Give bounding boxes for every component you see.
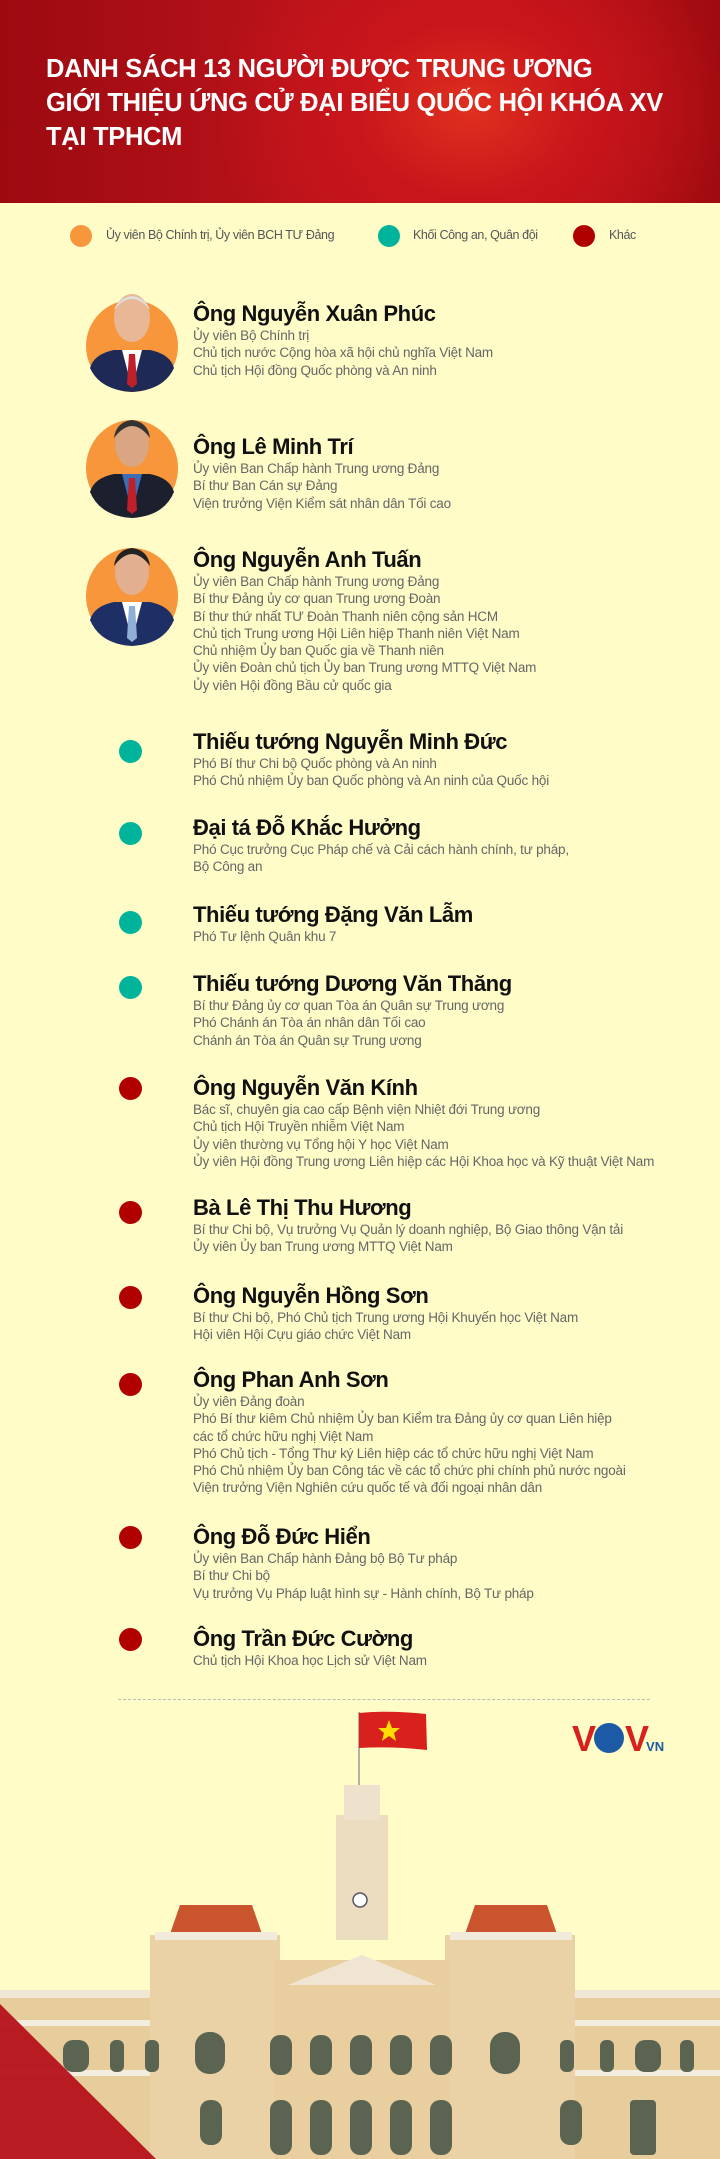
legend: Ủy viên Bộ Chính trị, Ủy viên BCH TƯ Đảng [106,228,334,242]
entry: Trần Đức Cường: Ông Trần Đức Cường [193,1626,413,1651]
entry: Đỗ Đức Hiển: Vụ trưởng Vụ Pháp luật hình sự - Hành chính, Bộ Tư pháp [193,1586,534,1601]
entry: Lê Minh Trí: Bí thư Ban Cán sự Đảng [193,478,337,493]
entry: Nguyễn Văn Kính: Ủy viên Hội đồng Trung ương Liên hiệp các Hội Khoa học và Kỹ thuật Việt Nam [193,1154,654,1169]
entry: Nguyễn Anh Tuấn: Ủy viên Hội đồng Bầu cử quốc gia [193,678,392,693]
entry: Nguyễn Xuân Phúc: Chủ tịch nước Cộng hòa xã hội chủ nghĩa Việt Nam [193,345,493,360]
entry: Nguyễn Hồng Sơn: Ông Nguyễn Hồng Sơn [193,1283,428,1308]
entry: Phan Anh Sơn: Phó Chủ tịch - Tổng Thư ký Liên hiệp các tổ chức hữu nghị Việt Nam [193,1446,593,1461]
dot: teal [119,976,142,999]
red corner triangle [0,2004,156,2159]
entry: Lê Minh Trí: Viện trưởng Viện Kiểm sát nhân dân Tối cao [193,496,451,511]
entry: Đỗ Khắc Hưởng: Đại tá Đỗ Khắc Hưởng [193,815,421,840]
entry: Đỗ Khắc Hưởng [193,815,569,874]
title: TẠI TPHCM [46,123,182,151]
entry: Phan Anh Sơn: Phó Chủ nhiệm Ủy ban Công tác về các tổ chức phi chính phủ nước ngoài [193,1463,626,1478]
dot: teal [119,822,142,845]
dot: red [119,1373,142,1396]
entry: Nguyễn Xuân Phúc: Ông Nguyễn Xuân Phúc [193,301,436,326]
entry: Trần Đức Cường [193,1626,427,1668]
entry: Lê Thị Thu Hương: Bí thư Chi bộ, Vụ trưởng Vụ Quản lý doanh nghiệp, Bộ Giao thông Vận tải [193,1222,623,1237]
entry: Lê Thị Thu Hương [193,1195,623,1254]
entry: Nguyễn Anh Tuấn: Ủy viên Ban Chấp hành Trung ương Đảng [193,574,439,589]
entry: Lê Thị Thu Hương: Bà Lê Thị Thu Hương [193,1195,411,1220]
dot: red [119,1201,142,1224]
entry: Đỗ Đức Hiển: Bí thư Chi bộ [193,1568,270,1583]
entry: Nguyễn Văn Kính: Bác sĩ, chuyên gia cao cấp Bệnh viện Nhiệt đới Trung ương [193,1102,540,1117]
legend: Khối Công an, Quân đội [413,228,538,242]
dot: red [119,1077,142,1100]
entry: Đỗ Đức Hiển [193,1524,534,1601]
entry: Đặng Văn Lẫm [193,902,473,944]
title: DANH SÁCH 13 NGƯỜI ĐƯỢC TRUNG ƯƠNG [46,55,592,83]
entry: Đỗ Đức Hiển: Ủy viên Ban Chấp hành Đảng bộ Bộ Tư pháp [193,1551,457,1566]
dot: teal [119,740,142,763]
entry: Lê Minh Trí: Ủy viên Ban Chấp hành Trung ương Đảng [193,461,439,476]
entry: Đỗ Đức Hiển: Ông Đỗ Đức Hiển [193,1524,370,1549]
entry: Nguyễn Minh Đức: Thiếu tướng Nguyễn Minh Đức [193,729,507,754]
entry: Đỗ Khắc Hưởng: Bộ Công an [193,859,262,874]
entry: Nguyễn Hồng Sơn: Hội viên Hội Cựu giáo chức Việt Nam [193,1327,411,1342]
entry: Trần Đức Cường: Chủ tịch Hội Khoa học Lịch sử Việt Nam [193,1653,427,1668]
entry: Nguyễn Anh Tuấn: Bí thư Đảng ủy cơ quan Trung ương Đoàn [193,591,440,606]
legend: Khác [609,228,636,242]
entry: Lê Thị Thu Hương: Ủy viên Ủy ban Trung ương MTTQ Việt Nam [193,1239,453,1254]
entry: Nguyễn Minh Đức: Phó Chủ nhiệm Ủy ban Quốc phòng và An ninh của Quốc hội [193,773,549,788]
entry: Nguyễn Minh Đức [193,729,549,788]
entry: Nguyễn Văn Kính: Ông Nguyễn Văn Kính [193,1075,418,1100]
dot: red [119,1628,142,1651]
entry: Phan Anh Sơn: Phó Bí thư kiêm Chủ nhiệm Ủy ban Kiểm tra Đảng ủy cơ quan Liên hiệp [193,1411,612,1426]
entry: Nguyễn Văn Kính [193,1074,654,1169]
entry: Phan Anh Sơn: Viện trưởng Viện Nghiên cứu quốc tế và đối ngoại nhân dân [193,1480,542,1495]
entry: Lê Minh Trí: Ông Lê Minh Trí [193,434,353,459]
entry: Nguyễn Xuân Phúc: Chủ tịch Hội đồng Quốc phòng và An ninh [193,363,437,378]
entry: Nguyễn Anh Tuấn: Ủy viên Đoàn chủ tịch Ủy ban Trung ương MTTQ Việt Nam [193,660,536,675]
entry: Dương Văn Thăng: Chánh án Tòa án Quân sự Trung ương [193,1033,422,1048]
entry: Nguyễn Văn Kính: Chủ tịch Hội Truyền nhiễm Việt Nam [193,1119,404,1134]
legend [70,225,636,247]
header banner [0,0,720,203]
entry: Nguyễn Minh Đức: Phó Bí thư Chi bộ Quốc phòng và An ninh [193,756,437,771]
entry: Nguyễn Xuân Phúc [193,300,493,378]
entry: Dương Văn Thăng [193,971,512,1048]
entry: Dương Văn Thăng: Thiếu tướng Dương Văn Thăng [193,971,512,996]
entry: Nguyễn Anh Tuấn: Ông Nguyễn Anh Tuấn [193,547,421,572]
dot: red [119,1526,142,1549]
photo: Nguyễn Anh Tuấn [86,548,178,646]
photo: Lê Minh Trí [86,420,178,518]
entry: Phan Anh Sơn [193,1366,626,1495]
entry: Đặng Văn Lẫm: Thiếu tướng Đặng Văn Lẫm [193,902,473,927]
photo: Nguyễn Xuân Phúc [86,294,178,392]
entry: Nguyễn Hồng Sơn: Bí thư Chi bộ, Phó Chủ tịch Trung ương Hội Khuyến học Việt Nam [193,1310,578,1325]
entry: Lê Minh Trí [193,434,451,511]
entry: Nguyễn Anh Tuấn [193,546,536,693]
entry: Phan Anh Sơn: các tổ chức hữu nghị Việt Nam [193,1429,373,1444]
entry: Đỗ Khắc Hưởng: Phó Cục trưởng Cục Pháp chế và Cải cách hành chính, tư pháp, [193,842,569,857]
entry: Nguyễn Văn Kính: Ủy viên thường vụ Tổng hội Y học Việt Nam [193,1137,449,1152]
entry: Nguyễn Anh Tuấn: Bí thư thứ nhất TƯ Đoàn Thanh niên cộng sản HCM [193,609,498,624]
flag [359,1712,427,1790]
dot: red [119,1286,142,1309]
dot: teal [119,911,142,934]
entry: Dương Văn Thăng: Phó Chánh án Tòa án nhân dân Tối cao [193,1015,426,1030]
entry: Phan Anh Sơn: Ông Phan Anh Sơn [193,1367,388,1392]
entry: Đặng Văn Lẫm: Phó Tư lệnh Quân khu 7 [193,929,336,944]
entry: Nguyễn Anh Tuấn: Chủ tịch Trung ương Hội Liên hiệp Thanh niên Việt Nam [193,626,520,641]
city hall illustration with flag [0,1712,720,2159]
building [0,1785,720,2159]
entry: Nguyễn Anh Tuấn: Chủ nhiệm Ủy ban Quốc gia về Thanh niên [193,643,444,658]
title [46,54,664,151]
title: GIỚI THIỆU ỨNG CỬ ĐẠI BIỂU QUỐC HỘI KHÓA XV [46,89,663,117]
VOV logo: V VVN [572,1718,664,1759]
entry: Nguyễn Xuân Phúc: Ủy viên Bộ Chính trị [193,328,309,343]
entry: Dương Văn Thăng: Bí thư Đảng ủy cơ quan Tòa án Quân sự Trung ương [193,998,504,1013]
entry: Nguyễn Hồng Sơn [193,1282,578,1342]
entry: Phan Anh Sơn: Ủy viên Đảng đoàn [193,1394,304,1409]
